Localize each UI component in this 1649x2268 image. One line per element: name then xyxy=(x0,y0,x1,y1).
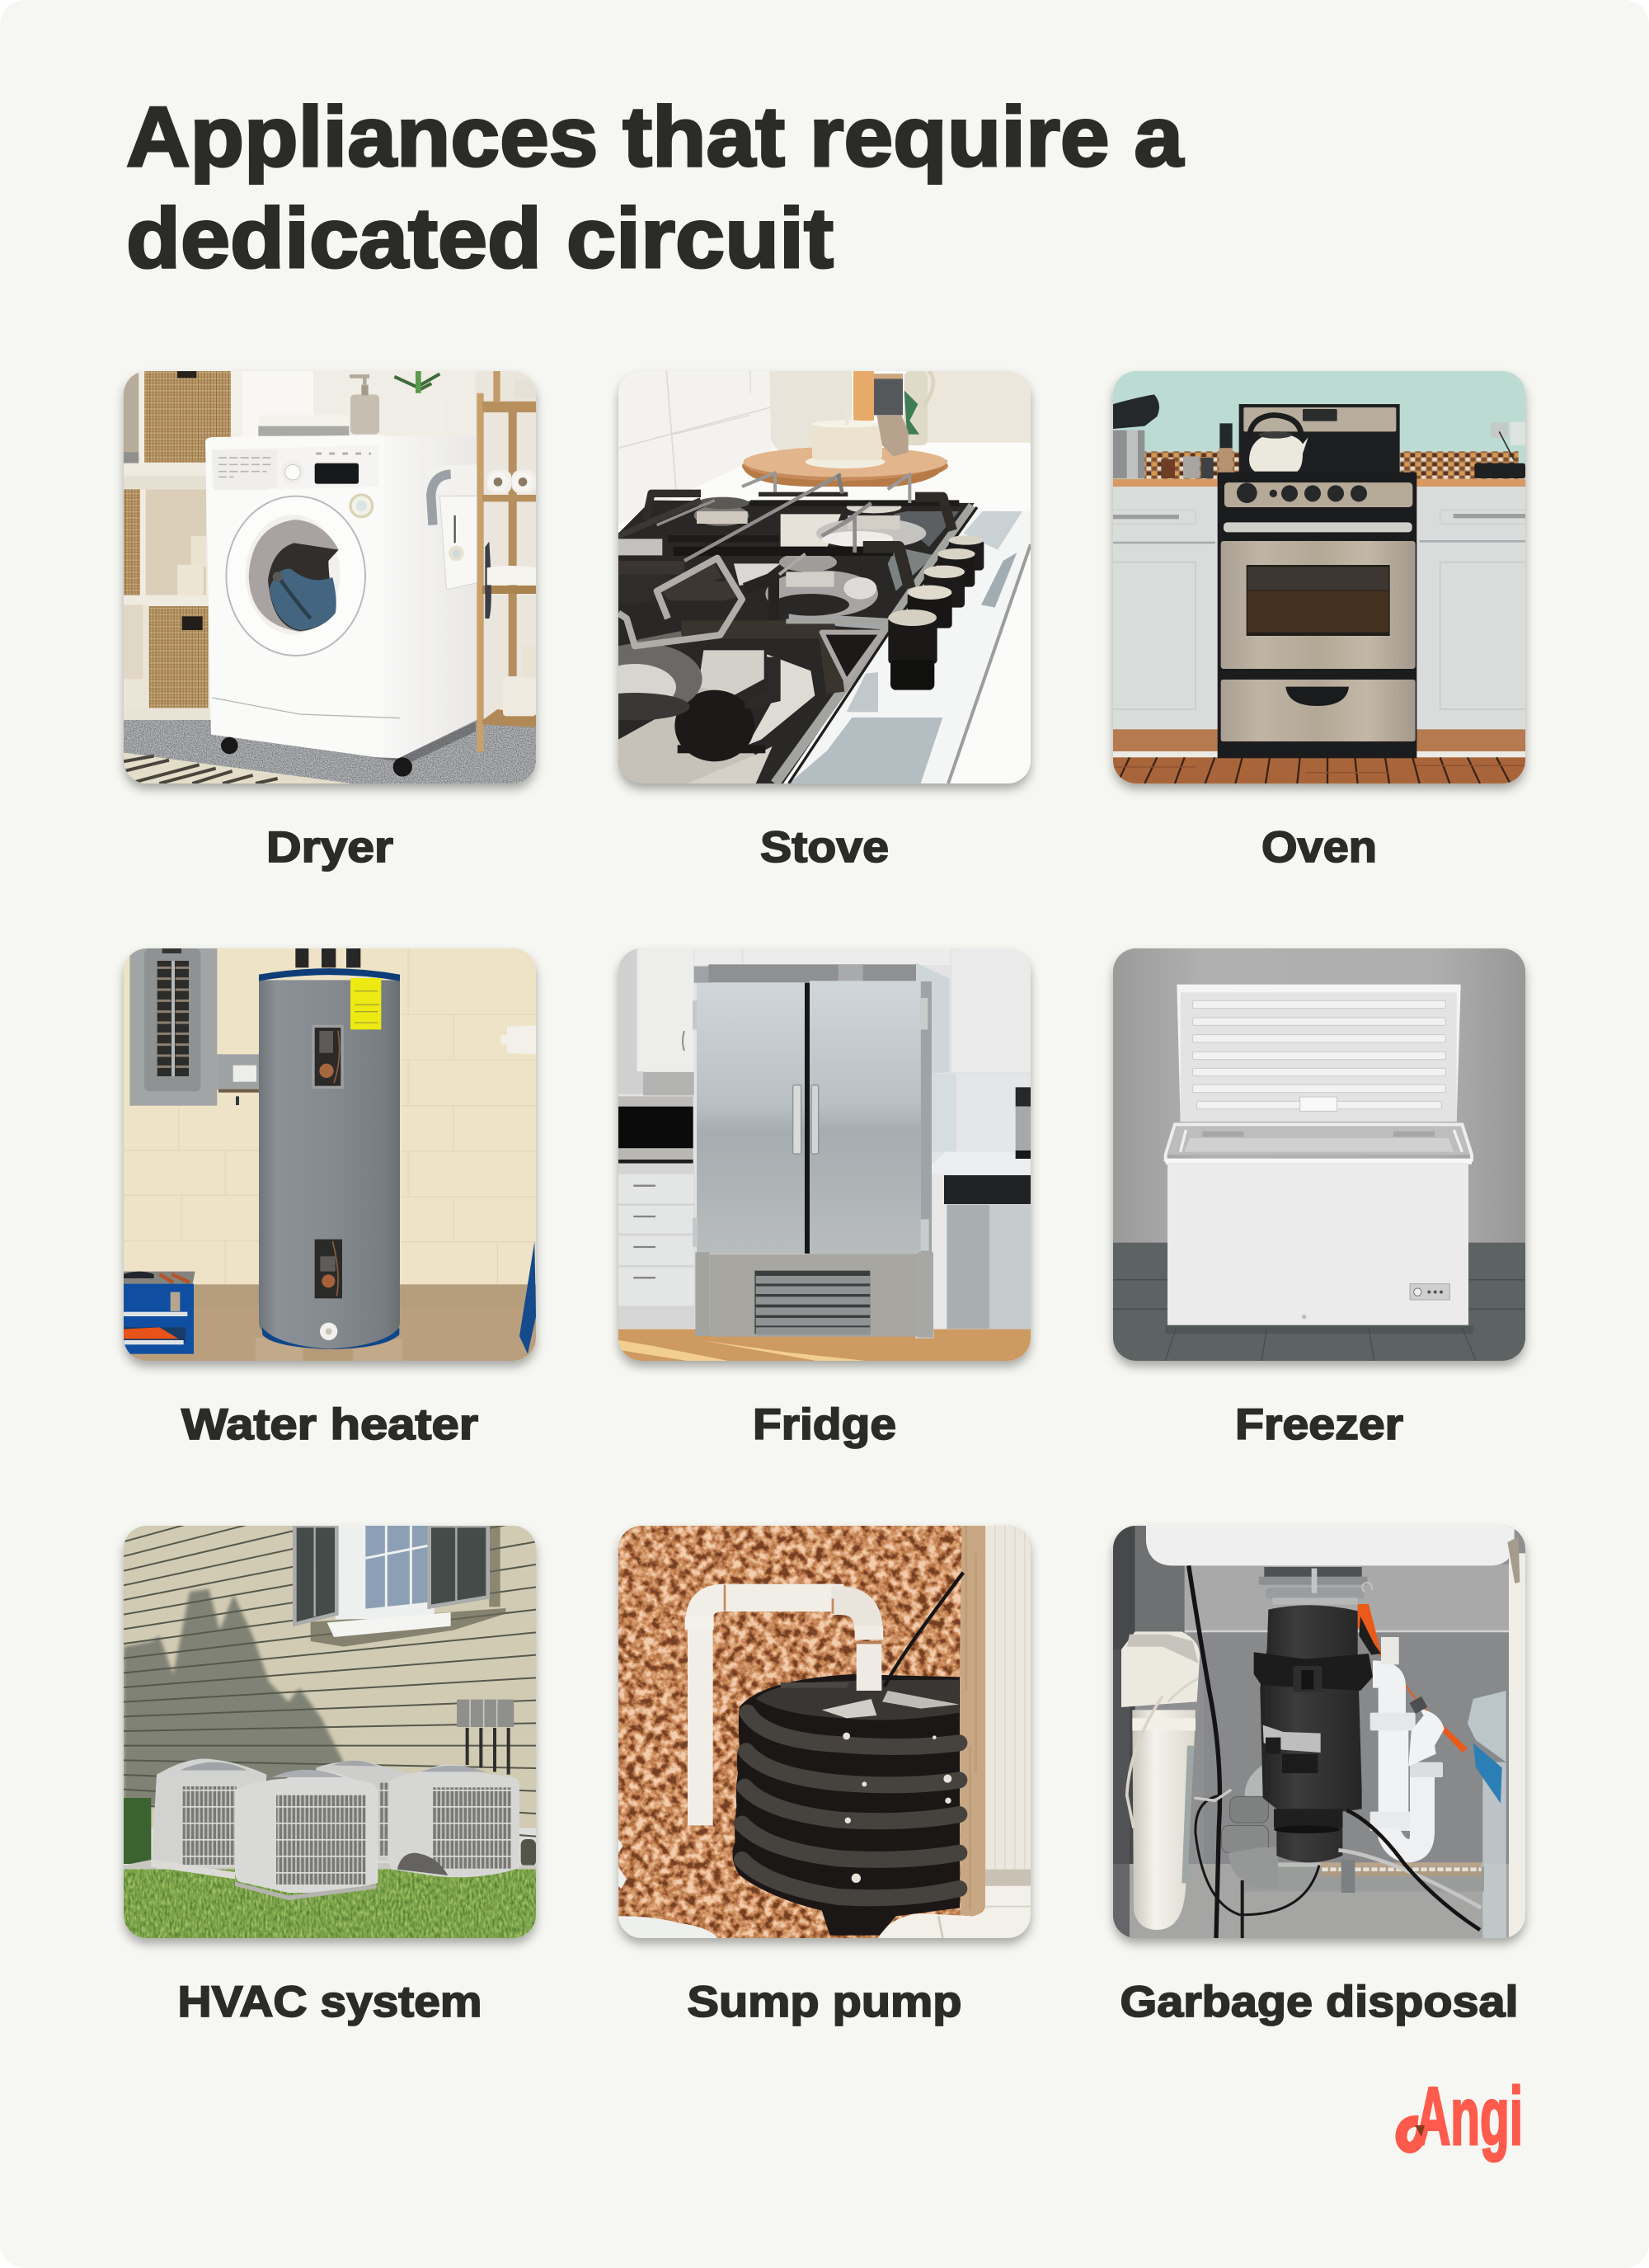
panel: fridge xyxy=(618,948,1031,1449)
burners xyxy=(618,496,927,721)
bamboo ladder shelf xyxy=(477,371,536,752)
water heater tank xyxy=(259,968,400,1349)
tree shadow on wall xyxy=(124,1589,344,1806)
photo: stainless steel fridge in kitchen xyxy=(618,948,1031,1361)
label: Garbage disposal: Garbage disposal xyxy=(1120,1978,1519,2026)
panel: HVAC system xyxy=(121,1428,536,2026)
countertops xyxy=(1113,479,1219,487)
panel: garbage disposal xyxy=(1113,1526,1525,2026)
striped rug xyxy=(124,753,352,783)
window xyxy=(294,1526,505,1647)
panel: oven xyxy=(1111,371,1528,872)
title: dedicated circuit xyxy=(126,191,834,285)
photo: gas stove cooktop xyxy=(618,371,1031,783)
label: Sump pump: Sump pump xyxy=(688,1978,961,2026)
blue toolbox xyxy=(124,1272,195,1354)
jars and bottle xyxy=(1161,423,1233,478)
sink bowl xyxy=(1146,1526,1520,1583)
label: Fridge: Fridge xyxy=(753,1400,896,1449)
stacked black corrugated basin xyxy=(732,1674,960,1936)
disconnect box xyxy=(217,1054,260,1105)
siding lines xyxy=(124,1428,536,1837)
kitchen items on wooden board xyxy=(742,371,948,487)
back AC unit xyxy=(316,1761,410,1861)
label: Dryer: Dryer xyxy=(266,823,393,872)
floor xyxy=(618,1329,1031,1361)
open lid xyxy=(1177,985,1461,1122)
panel: dryer xyxy=(124,371,536,872)
cast iron grates xyxy=(618,473,959,693)
right AC unit xyxy=(388,1765,519,1877)
fridge body xyxy=(693,963,950,1339)
label: Stove: Stove xyxy=(760,823,889,872)
disposal mount xyxy=(1259,1567,1372,1605)
grey drain pipe xyxy=(1222,1765,1484,1893)
glass cooktop xyxy=(618,501,975,783)
photo: sump pump in gravel xyxy=(618,1526,1031,1938)
steel frame and right glass strip xyxy=(775,506,1031,783)
photo: dryer in laundry room xyxy=(124,371,536,783)
electrical disconnects xyxy=(457,1700,514,1775)
stove knobs xyxy=(888,535,984,690)
label: Water heater: Water heater xyxy=(181,1400,478,1449)
disposal body xyxy=(1254,1605,1373,1862)
logo: Angi xyxy=(1401,2070,1523,2162)
orange strap and blue bag xyxy=(1358,1604,1506,1938)
counter, coffee maker and dishwasher xyxy=(932,1087,1031,1330)
photo: stainless steel range xyxy=(1113,371,1525,783)
black cable behind xyxy=(1189,1565,1219,1938)
title: Appliances that require a xyxy=(126,89,1184,184)
lower drawers xyxy=(618,1164,695,1329)
upper cabinets xyxy=(618,948,1031,1152)
logo: Angi: Angi xyxy=(1416,2070,1523,2162)
washer door xyxy=(226,496,365,656)
right cabinet wall xyxy=(1509,1553,1525,1938)
label: HVAC system: HVAC system xyxy=(178,1978,482,2026)
filter cartridge xyxy=(1121,1631,1200,1930)
PVC discharge pipe xyxy=(685,1585,883,1825)
white PVC trap xyxy=(1370,1637,1445,1862)
wood blocks xyxy=(256,1338,402,1361)
lawn left and grass xyxy=(124,1798,151,1864)
panel: water heater xyxy=(124,948,536,1449)
fridge base grille xyxy=(695,1252,933,1338)
panel: sump pump xyxy=(618,1526,1031,2026)
black wire xyxy=(885,1573,963,1687)
label: Freezer: Freezer xyxy=(1235,1400,1403,1449)
freezer chest xyxy=(1166,1124,1472,1325)
front AC unit xyxy=(235,1770,378,1900)
baseboard and floor xyxy=(1113,729,1525,783)
conduit pipes xyxy=(295,948,308,967)
photo: water heater in garage xyxy=(124,948,536,1361)
photo: garbage disposal under sink xyxy=(1113,1526,1525,1938)
cabinets xyxy=(1113,510,1525,710)
kettle xyxy=(1249,415,1308,472)
photo: chest freezer xyxy=(1113,948,1525,1361)
range body xyxy=(1218,404,1416,758)
title xyxy=(126,89,1184,285)
foundation strip and downspout xyxy=(878,1526,1031,1938)
concrete slab xyxy=(124,1860,536,1903)
black and steel cables xyxy=(1194,1790,1482,1938)
microwave xyxy=(618,1096,693,1164)
breaker panel xyxy=(129,948,217,1106)
items on washer xyxy=(258,371,443,436)
floor carpet xyxy=(124,720,536,783)
blue board at right xyxy=(519,1241,536,1354)
label: Oven: Oven xyxy=(1261,823,1377,872)
panel: stove xyxy=(580,371,1031,872)
white stones at bottom xyxy=(618,1916,717,1938)
left AC unit xyxy=(151,1758,266,1879)
washer body xyxy=(205,435,477,777)
utensil holder xyxy=(1113,394,1159,478)
panel: freezer xyxy=(1113,948,1525,1449)
photo: outdoor AC units against siding xyxy=(124,1526,536,1938)
pipe fitting xyxy=(500,1025,536,1054)
